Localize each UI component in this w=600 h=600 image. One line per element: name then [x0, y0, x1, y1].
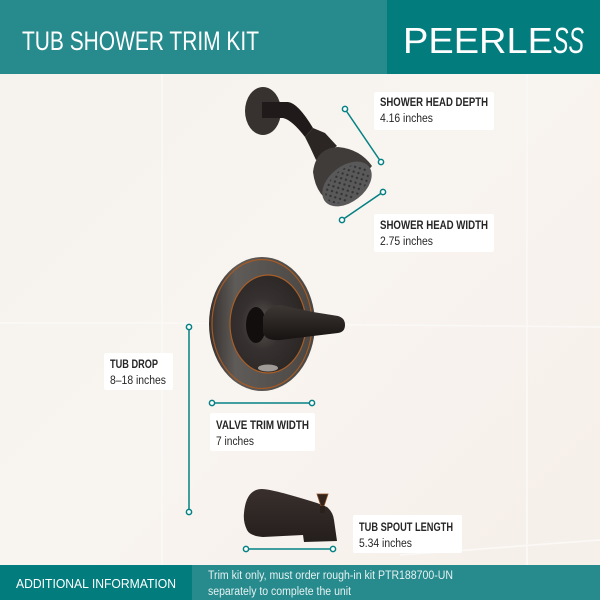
label: tub spout length	[353, 515, 462, 553]
label: shower head depth: SHOWER HEAD DEPTH	[380, 97, 488, 109]
tub spout	[244, 489, 337, 542]
logo: Peerless: PEERLE	[403, 20, 553, 61]
measure line: tub spout length	[243, 546, 336, 552]
label: shower head width	[374, 214, 494, 252]
label: tub spout length: 5.34 inches	[359, 538, 412, 550]
label: shower head depth: 4.16 inches	[380, 113, 433, 125]
measure line: tub drop	[186, 324, 192, 515]
label: valve trim width	[210, 413, 315, 451]
footer bar: separately to complete the unit	[208, 586, 352, 598]
footer note: Trim kit only, must order rough-in kit PTR188700-UN	[208, 570, 453, 582]
logo: Peerless: SS	[553, 20, 584, 61]
measure line: shower head depth	[342, 106, 384, 165]
footer heading: ADDITIONAL INFORMATION	[16, 576, 176, 591]
shower head and arm	[245, 87, 380, 215]
title: TUB SHOWER TRIM KIT	[22, 26, 259, 56]
valve trim plate and lever	[209, 257, 345, 391]
label: tub drop: TUB DROP	[110, 359, 158, 371]
label: tub drop	[104, 353, 173, 390]
label: tub spout length: TUB SPOUT LENGTH	[359, 522, 453, 534]
label: shower head depth	[374, 92, 494, 130]
footer bar	[0, 565, 600, 600]
measure line: valve trim width	[209, 400, 315, 406]
label: valve trim width: 7 inches	[216, 436, 254, 448]
measure line: shower head width	[339, 189, 386, 223]
label: shower head width: SHOWER HEAD WIDTH	[380, 220, 488, 232]
header bar	[0, 0, 600, 74]
label: valve trim width: VALVE TRIM WIDTH	[216, 420, 309, 432]
label: shower head width: 2.75 inches	[380, 236, 433, 248]
label: tub drop: 8–18 inches	[110, 375, 166, 387]
